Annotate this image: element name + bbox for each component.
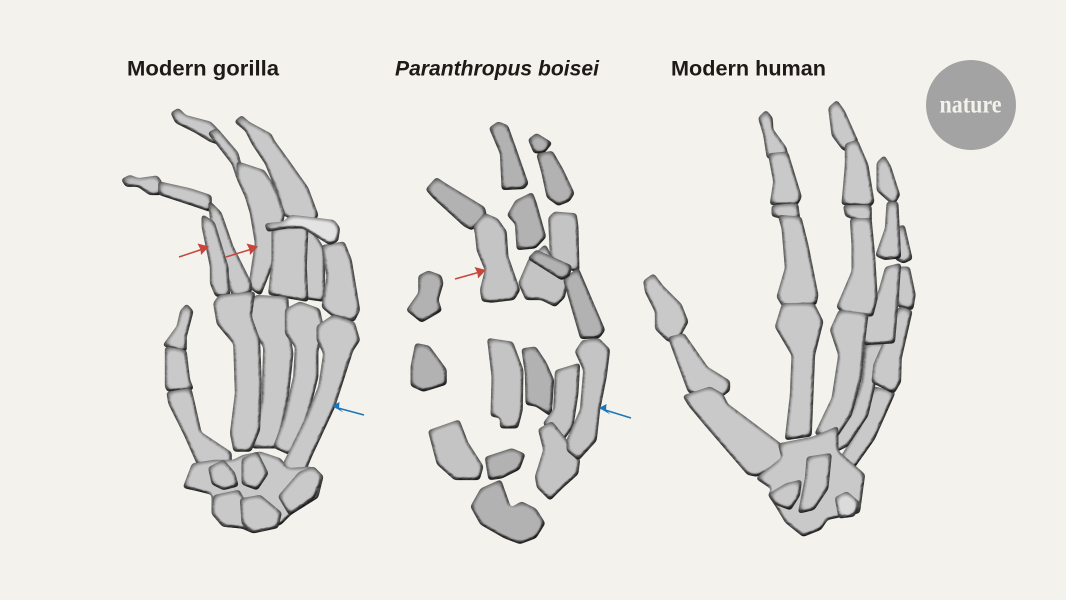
fingers bbox=[123, 110, 358, 320]
arrow: gorilla red 2 bbox=[226, 244, 258, 257]
illustration: human hand bones bbox=[645, 102, 914, 535]
finger fragments, top bbox=[491, 123, 573, 248]
illustration: Paranthropus hand bones bbox=[408, 123, 608, 542]
index finger bbox=[760, 112, 822, 438]
arrow: Paranthropus red bbox=[455, 267, 486, 279]
thumb bbox=[165, 306, 230, 463]
logo: nature badge bbox=[926, 60, 1016, 150]
little and ring fingers bbox=[833, 158, 914, 467]
arrow: Paranthropus blue bbox=[599, 404, 631, 418]
carpals bbox=[758, 428, 863, 535]
logo: nature badge: nature bbox=[940, 92, 1002, 118]
heading: Modern gorilla: Modern gorilla bbox=[127, 58, 279, 80]
middle finger bbox=[817, 102, 876, 435]
arrow: gorilla red 1 bbox=[179, 244, 209, 257]
carpals bbox=[185, 453, 322, 532]
illustration: gorilla hand bones bbox=[123, 110, 358, 532]
finger with curved phalanx bbox=[428, 179, 518, 301]
heading: Modern human: Modern human bbox=[671, 58, 826, 80]
metacarpals bbox=[215, 293, 358, 473]
isolated carpal fragments and metacarpals bbox=[408, 272, 608, 542]
arrow: gorilla blue bbox=[332, 402, 364, 415]
heading: Paranthropus boisei: Paranthropus boisei bbox=[395, 58, 600, 80]
thumb bbox=[645, 276, 787, 475]
overlapping phalanges, right bbox=[520, 213, 603, 337]
